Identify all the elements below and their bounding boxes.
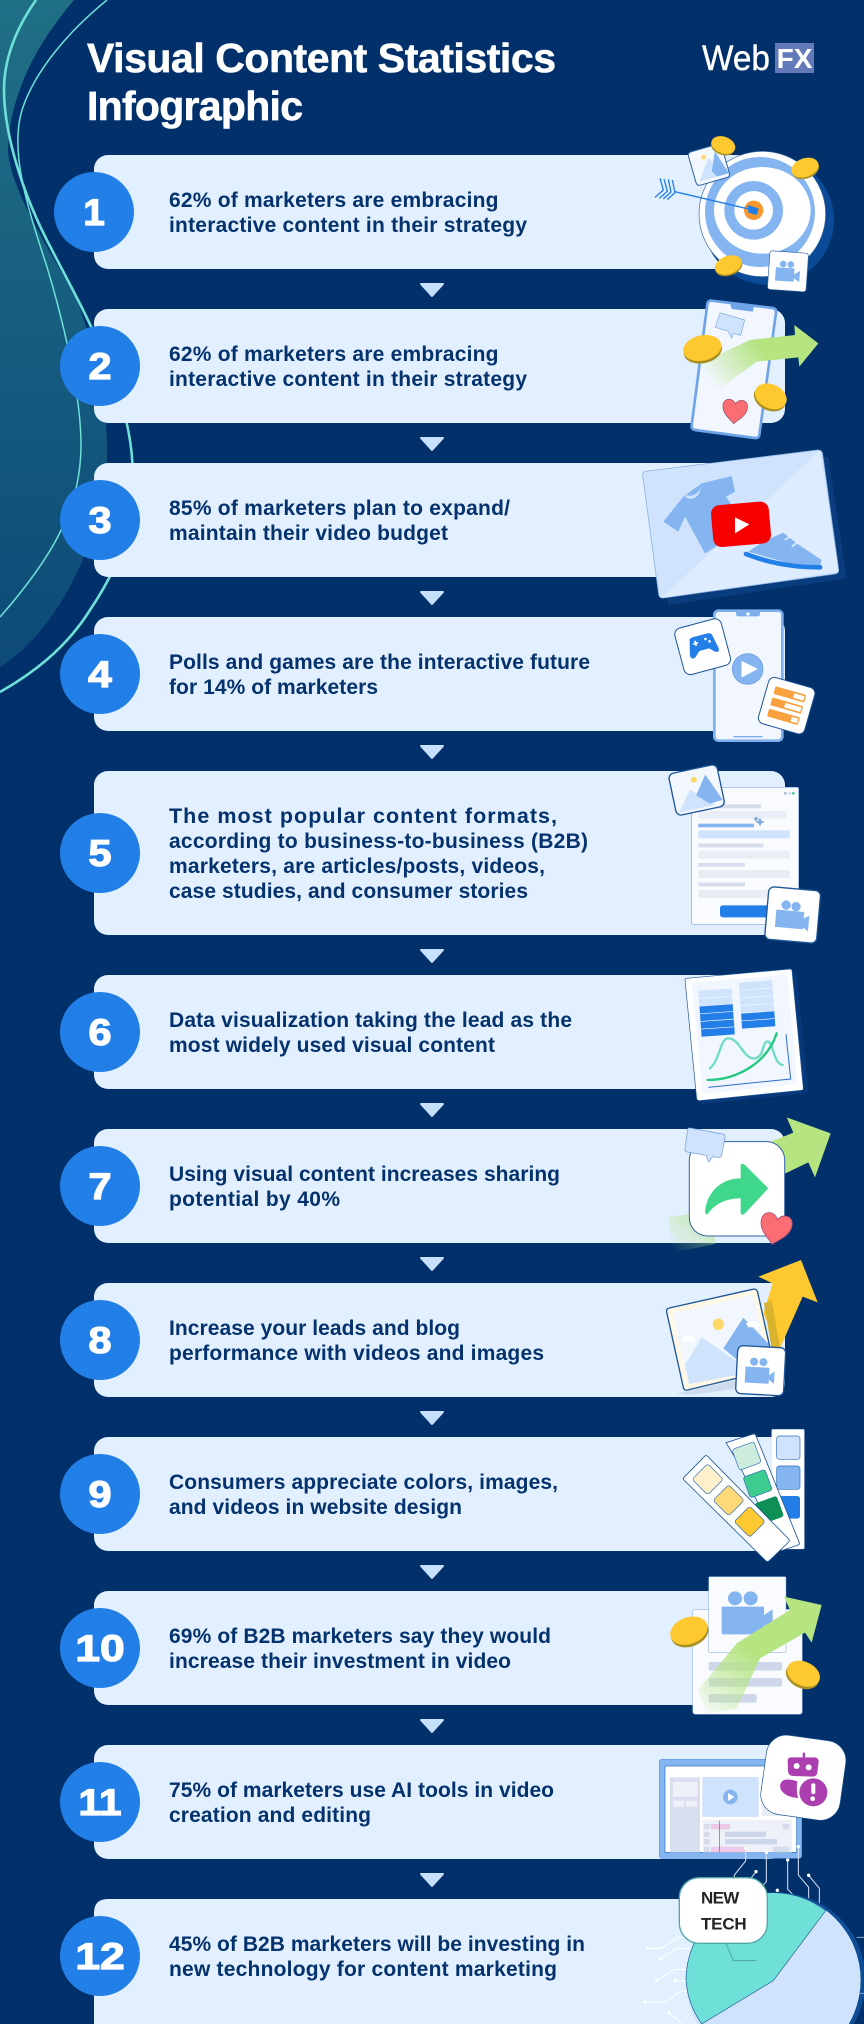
panel: step 9: [60, 1437, 785, 1551]
panel: step 11: creation and editing: [169, 1804, 371, 1827]
icon: video editor screen with AI robot card: [659, 1732, 849, 1858]
panel: step 11: [60, 1745, 785, 1859]
panel: step 5: marketers, are articles/posts, videos,: [169, 855, 545, 878]
panel: step 10: 10: [75, 1628, 125, 1669]
icon: phone with growth arrow, coins and heart: [681, 301, 818, 438]
icon: document with image and video cards: [668, 764, 821, 943]
panel: step 6: 6: [88, 1012, 112, 1053]
icon: circuit pie chart with new tech bubble: NEW: [701, 1888, 740, 1907]
panel: step 3: maintain their video budget: [169, 522, 448, 545]
panel: step 10: 69% of B2B marketers say they would: [169, 1625, 551, 1648]
panel: step 12: 12: [75, 1936, 125, 1977]
panel: step 4: for 14% of marketers: [169, 676, 378, 699]
panel: step 2: 2: [88, 346, 112, 387]
icon: image card with rising yellow arrow and video card: [667, 1260, 818, 1396]
panel: step 8: [60, 1283, 785, 1397]
panel: step 6: Data visualization taking the lead as the: [169, 1009, 572, 1032]
panel: step 11: 75% of marketers use AI tools in video: [169, 1779, 554, 1802]
panel: step 5: The most popular content formats,: [169, 804, 557, 828]
panel: step 11: 11: [78, 1783, 122, 1824]
panel: step 2: 62% of marketers are embracing: [169, 343, 498, 366]
panel: step 4: 4: [88, 655, 112, 695]
panel: step 2: interactive content in their strategy: [169, 368, 527, 391]
logo: WebFX: [702, 39, 814, 78]
icon: colour swatch fan: [683, 1429, 804, 1561]
title: Infographic: [87, 83, 303, 129]
icon: documents with video icon, growth arrow and coins: [666, 1577, 824, 1714]
title: [87, 35, 556, 129]
panel: step 1: 62% of marketers are embracing: [169, 189, 498, 212]
panel: step 5: case studies, and consumer stories: [169, 880, 528, 903]
panel: step 12: new technology for content marketing: [169, 1958, 557, 1981]
panel: step 8: performance with videos and images: [169, 1342, 544, 1365]
icon: report with bar and line charts: [685, 969, 808, 1104]
panel: step 7: potential by 40%: [169, 1188, 340, 1211]
panel: step 8: 8: [88, 1320, 112, 1361]
panel: step 9: and videos in website design: [169, 1496, 462, 1519]
panel: step 6: most widely used visual content: [169, 1034, 495, 1057]
panel: step 7: [60, 1129, 785, 1243]
icon: phone with play button, gamepad and poll cards: [673, 611, 816, 741]
logo: WebFX: Web: [702, 39, 770, 78]
panel: step 10: [60, 1591, 785, 1705]
title: Visual Content Statistics: [87, 35, 556, 81]
icon: circuit pie chart with new tech bubble: [643, 1845, 864, 2024]
panel: step 9: Consumers appreciate colors, images,: [169, 1471, 558, 1494]
icon: circuit pie chart with new tech bubble: TECH: [701, 1914, 747, 1933]
panel: step 5: [60, 771, 785, 935]
panel: step 3: 85% of marketers plan to expand/: [169, 497, 510, 520]
panel: step 1: 1: [83, 193, 105, 234]
panel: step 12: [60, 1899, 785, 2024]
logo: WebFX: FX: [777, 43, 813, 74]
panel: step 1: interactive content in their strategy: [169, 214, 527, 237]
panel: step 9: 9: [88, 1474, 112, 1515]
panel: step 5: 5: [88, 833, 112, 874]
down arrows between steps: [421, 284, 443, 1886]
panel: step 12: 45% of B2B marketers will be investing in: [169, 1933, 585, 1956]
panel: step 10: increase their investment in video: [169, 1650, 511, 1673]
panel: step 5: according to business-to-business (B2B): [169, 830, 588, 853]
icon: target with arrow, coins, image and video cards: [655, 133, 834, 292]
icon: share arrow card with bubble and heart: [668, 1117, 831, 1253]
panel: step 4: Polls and games are the interactive future: [169, 651, 590, 674]
panel: step 6: [60, 975, 785, 1089]
panel: step 3: 3: [88, 500, 112, 541]
panel: step 2: [60, 309, 785, 423]
panel: step 7: 7: [88, 1166, 112, 1207]
panel: step 8: Increase your leads and blog: [169, 1317, 460, 1340]
decorative teal wave shape: [0, 0, 133, 692]
panel: step 4: [60, 617, 785, 731]
panel: step 1: [54, 155, 785, 269]
icon: video card with shirt, shoe and play button: [643, 450, 847, 605]
panel: step 7: Using visual content increases sharing: [169, 1163, 560, 1186]
panel: step 3: [60, 463, 785, 577]
